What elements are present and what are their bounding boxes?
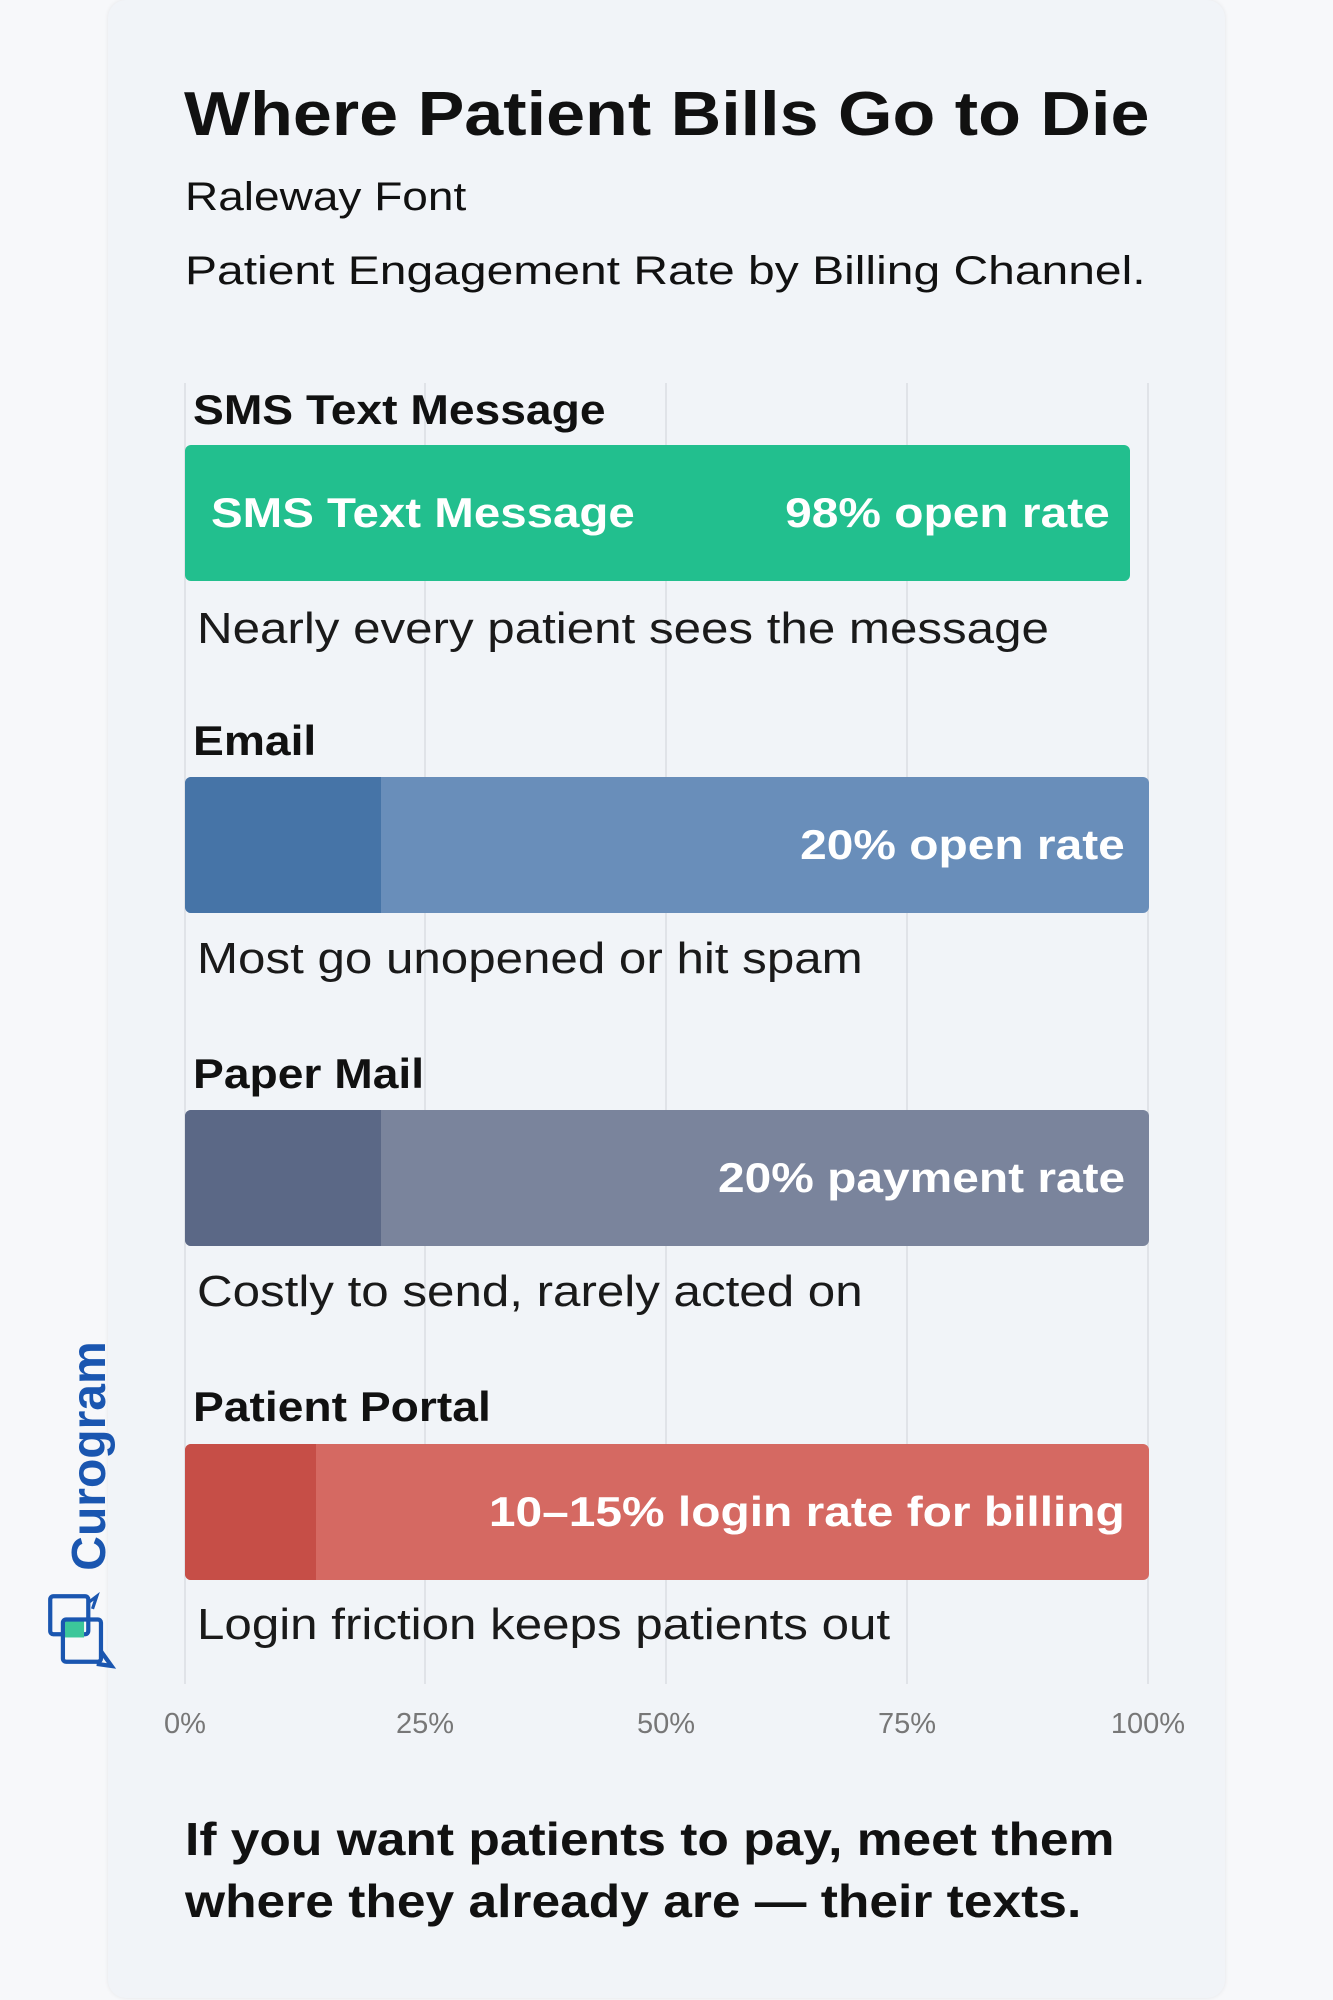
bar: Email: 20% open rate: [800, 821, 1125, 868]
label: Paper Mail: Paper Mail: [193, 1050, 424, 1097]
label: Patient Portal: Patient Portal: [193, 1383, 491, 1430]
subtitle: font: Raleway Font: [185, 175, 466, 219]
axis labels: 100%: [1111, 1708, 1185, 1740]
axis labels: 0%: [164, 1708, 206, 1740]
bar: Paper Mail: [185, 1110, 1149, 1246]
label: Email: Email: [193, 717, 316, 764]
note: Patient Portal: Login friction keeps patients out: [197, 1600, 890, 1649]
logo icon: [48, 1592, 116, 1669]
axis labels: 25%: [396, 1708, 454, 1740]
note: SMS: Nearly every patient sees the message: [197, 604, 1049, 653]
title: Where Patient Bills Go to Die: [184, 80, 1149, 149]
note: Email: Most go unopened or hit spam: [197, 934, 863, 983]
bar: SMS: [185, 445, 1130, 581]
axis labels: 50%: [637, 1708, 695, 1740]
subtitle: chart description: Patient Engagement Rate by Billing Channel.: [185, 249, 1146, 293]
bar: Email: [185, 777, 1149, 913]
label: SMS: SMS Text Message: [193, 386, 606, 433]
bar: Patient Portal: 10–15% login rate for billing: [489, 1488, 1125, 1535]
bar: Patient Portal: [185, 1444, 1149, 1580]
bar: SMS: SMS Text Message: [211, 489, 635, 536]
bar: Paper Mail: 20% payment rate: [718, 1154, 1125, 1201]
footer takeaway: [184, 1813, 1114, 1927]
bar: SMS: 98% open rate: [785, 489, 1110, 536]
axis labels: 75%: [878, 1708, 936, 1740]
logo text: Curogram: [63, 1341, 116, 1571]
logo: Curogram: [48, 1341, 116, 1669]
footer takeaway: If you want patients to pay, meet them: [185, 1813, 1114, 1865]
footer takeaway: where they already are — their texts.: [185, 1875, 1081, 1927]
note: Paper Mail: Costly to send, rarely acted on: [197, 1267, 863, 1316]
